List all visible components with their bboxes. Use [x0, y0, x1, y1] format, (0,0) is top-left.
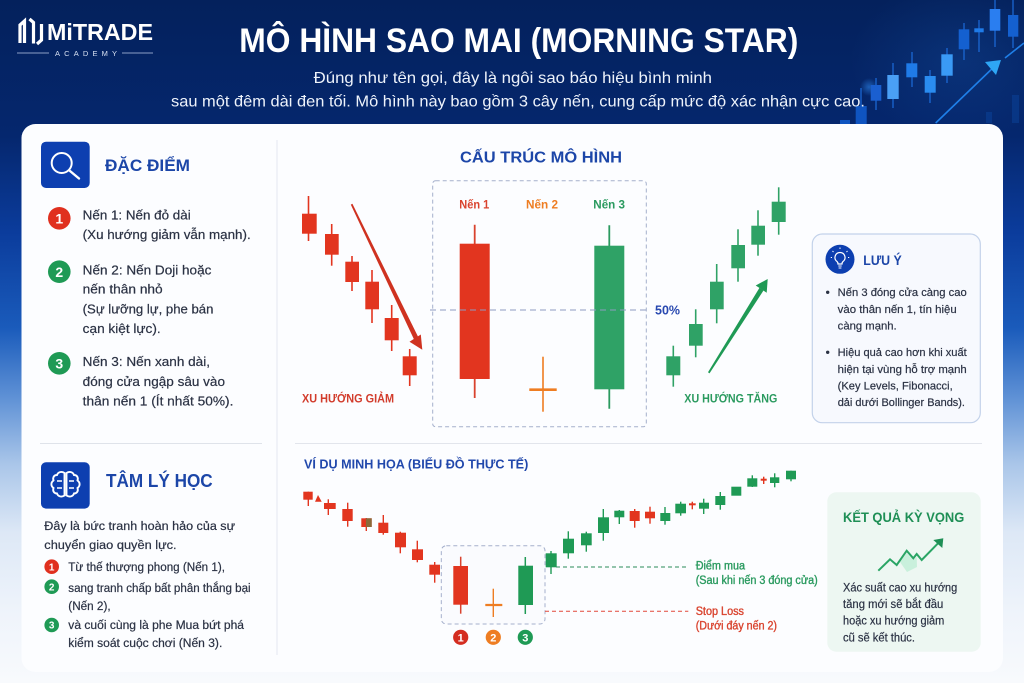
- list item 2: (Nến 2),: [68, 601, 111, 613]
- logo: MiTrade Academy: ACADEMY: [55, 49, 117, 58]
- icon: brain: [41, 462, 90, 509]
- result text: cũ sẽ kết thúc.: [843, 632, 915, 644]
- title: MÔ HÌNH SAO MAI (MORNING STAR): [239, 21, 798, 60]
- section: đặc điểm: [41, 142, 251, 408]
- label: stop loss: (Dưới đáy nến 2): [696, 621, 777, 633]
- subtitle: sau một đêm dài đen tối. Mô hình này bao gồm 3 cây nến, cung cấp mức độ xác nhận cực cao.: [171, 94, 865, 110]
- subtitle: [171, 70, 865, 110]
- icon: magnifier: [41, 142, 90, 188]
- badge 1: [453, 630, 468, 645]
- candle 1: [453, 557, 468, 614]
- section: tâm lý học: [41, 462, 251, 650]
- note 1: Nến 3 đóng cửa càng cao: [838, 287, 967, 299]
- line: buy point: [556, 566, 688, 568]
- badge 3: 3: [522, 632, 528, 644]
- label: xu hướng giảm: XU HƯỚNG GIẢM: [302, 392, 394, 406]
- label: nến 3: Nến 3: [593, 198, 625, 212]
- list item 1: Từ thế thượng phong (Nến 1),: [68, 562, 225, 574]
- badge 1: 1: [458, 632, 464, 644]
- item 3: 3: [55, 356, 63, 372]
- chart: real example: [303, 471, 796, 645]
- note 1: vào thân nến 1, tín hiệu: [838, 304, 957, 316]
- label: điểm mua: [696, 560, 818, 587]
- candle 2: [485, 589, 502, 617]
- intro text: Đây là bức tranh hoàn hảo của sự: [44, 521, 235, 533]
- logo: MiTrade Academy: [17, 19, 153, 58]
- line: stop loss: [545, 610, 688, 612]
- item 2: (Sự lưỡng lự, phe bán: [83, 302, 213, 316]
- arrow: downtrend: [351, 204, 422, 350]
- candle: big red: [460, 225, 490, 398]
- panel: kết quả kỳ vọng: [827, 492, 981, 652]
- heading: lưu ý: LƯU Ý: [863, 253, 902, 268]
- note 2: (Key Levels, Fibonacci,: [838, 380, 953, 392]
- pattern box: three candles: [430, 181, 648, 427]
- panel: lưu ý: [812, 234, 980, 423]
- logo: MiTrade Academy: MiTRADE: [47, 19, 153, 45]
- badge 2: [486, 630, 501, 645]
- result text: [843, 582, 957, 644]
- candle 3: [518, 557, 533, 614]
- list item 2: [44, 579, 251, 613]
- intro text: [44, 521, 235, 552]
- result text: tăng mới sẽ bắt đầu: [843, 598, 943, 611]
- subtitle: Đúng như tên gọi, đây là ngôi sao báo hiệu bình minh: [314, 70, 712, 87]
- item 2: nến thân nhỏ: [83, 282, 163, 296]
- label: stop loss: Stop Loss: [696, 606, 744, 618]
- chart: uptrend candles: [666, 187, 786, 387]
- result text: Xác suất cao xu hướng: [843, 582, 957, 594]
- item 3: thân nến 1 (Ít nhất 50%).: [83, 394, 233, 408]
- item 2: cạn kiệt lực).: [83, 322, 161, 336]
- badge 2: 2: [490, 632, 496, 644]
- red interim candles: [630, 477, 767, 528]
- candle: big green: [594, 225, 624, 409]
- intro text: chuyển giao quyền lực.: [44, 540, 177, 552]
- item 3: [48, 352, 233, 408]
- badge 3: [518, 630, 533, 645]
- candle: doji: [529, 357, 557, 412]
- label: nến 1: Nến 1: [459, 198, 490, 212]
- item 3: Nến 3: Nến xanh dài,: [83, 355, 210, 369]
- item 1: (Xu hướng giảm vẫn mạnh).: [83, 227, 251, 242]
- label: nến 2: Nến 2: [526, 198, 558, 212]
- arrow: uptrend: [708, 279, 768, 373]
- label: xu hướng tăng: XU HƯỚNG TĂNG: [684, 392, 777, 406]
- note 1: càng mạnh.: [838, 320, 897, 332]
- label: stop loss: [696, 606, 777, 633]
- label: 50%: 50%: [655, 304, 680, 318]
- line: 50 percent level: [430, 309, 648, 311]
- icon: light bulb: [826, 245, 854, 274]
- icon: logo mark: [20, 19, 42, 44]
- note 2: Hiệu quả cao hơn khi xuất: [838, 347, 967, 359]
- note 2: [826, 347, 967, 409]
- result text: hoặc xu hướng giảm: [843, 616, 944, 628]
- list item 2: 2: [49, 582, 55, 593]
- heading: ví dụ minh họa: VÍ DỤ MINH HỌA (BIỂU ĐỒ THỰC TẾ): [304, 456, 528, 472]
- item 1: [48, 207, 251, 242]
- highlight box: [441, 546, 545, 624]
- note 2: hiện tại vùng hỗ trợ mạnh: [838, 363, 967, 376]
- list item 3: [44, 618, 245, 650]
- ascending candles: [546, 471, 796, 574]
- main card: [22, 124, 1003, 672]
- item 3: đóng cửa ngập sâu vào: [83, 375, 225, 389]
- list item 3: 3: [49, 621, 55, 632]
- label: điểm mua: Điểm mua: [696, 560, 746, 572]
- item 2: [48, 260, 213, 336]
- note 1: [826, 287, 967, 332]
- item 1: 1: [55, 210, 63, 226]
- chart: downtrend candles: [302, 196, 417, 386]
- label: điểm mua: (Sau khi nến 3 đóng cửa): [696, 575, 818, 587]
- item 2: Nến 2: Nến Doji hoặc: [83, 264, 211, 278]
- list item 1: 1: [49, 562, 55, 573]
- icon: rising line: [878, 538, 943, 572]
- item 1: Nến 1: Nến đỏ dài: [83, 208, 191, 222]
- panel: left column: [40, 140, 277, 655]
- decorative chart: header top right: [840, 0, 1024, 140]
- heading: kết quả kỳ vọng: KẾT QUẢ KỲ VỌNG: [843, 508, 964, 525]
- item 2: 2: [55, 264, 63, 280]
- descending candles: [303, 492, 440, 583]
- heading: đặc điểm: ĐẶC ĐIỂM: [105, 156, 190, 175]
- list item 2: sang tranh chấp bất phân thắng bại: [68, 582, 251, 595]
- list item 3: kiểm soát cuộc chơi (Nến 3).: [68, 638, 222, 650]
- heading: tâm lý học: TÂM LÝ HỌC: [106, 470, 213, 491]
- note 2: dải dưới Bollinger Bands).: [838, 397, 965, 409]
- heading: cấu trúc mô hình: CẤU TRÚC MÔ HÌNH: [460, 148, 622, 166]
- list item 3: và cuối cùng là phe Mua bứt phá: [68, 620, 245, 632]
